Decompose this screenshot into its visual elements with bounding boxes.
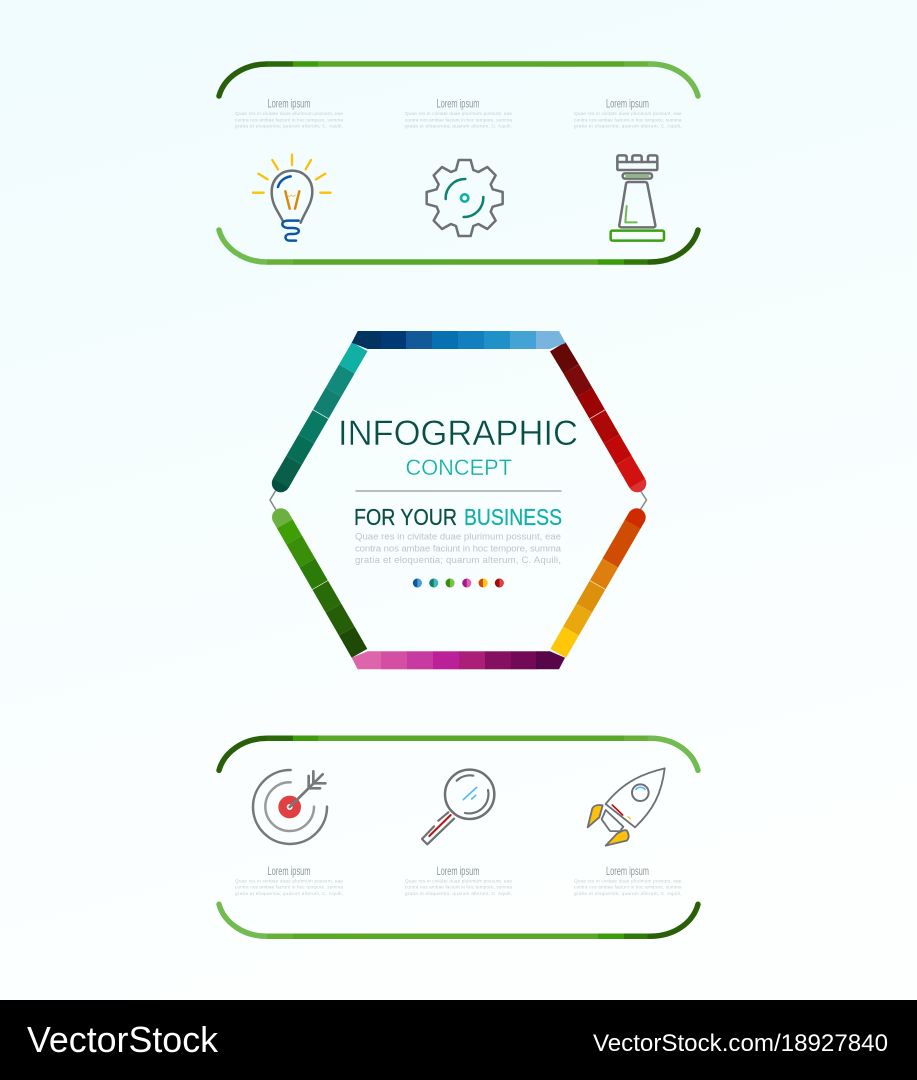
paragraph: Quae res in civitate duae plurimum possunt, eae: [355, 532, 561, 542]
hexagon side: upper left teal: [281, 347, 360, 483]
text block: top left: contra nos ambae faciunt in hoc tempore, summa: [235, 117, 343, 122]
text block: top center: [405, 96, 512, 129]
heading: [354, 504, 562, 530]
heading: BUSINESS: [464, 504, 562, 530]
text block: bottom right: gratia et eloquentia; quarum alterum, C. Aquili,: [574, 891, 682, 896]
text block: top left: Lorem ipsum: [268, 96, 311, 110]
title: INFOGRAPHIC: [338, 414, 578, 453]
text block: top center: gratia et eloquentia; quarum alterum, C. Aquili,: [405, 124, 512, 129]
text block: bottom left: gratia et eloquentia; quarum alterum, C. Aquili,: [235, 891, 343, 896]
text block: top center: Lorem ipsum: [436, 96, 480, 110]
text block: bottom center: gratia et eloquentia; quarum alterum, C. Aquili,: [405, 891, 512, 896]
text block: top center: contra nos ambae faciunt in hoc tempore, summa: [405, 117, 512, 122]
text block: top right: gratia et eloquentia; quarum alterum, C. Aquili,: [574, 124, 682, 129]
text block: bottom right: Lorem ipsum: [606, 864, 649, 878]
text block: top right: Lorem ipsum: [606, 96, 649, 110]
text block: top left: Quae res in civitate duae plurimum possunt, eae: [235, 111, 343, 116]
hexagon side: lower right orange: [558, 517, 637, 653]
footer image id: VectorStock.com/18927840: [593, 1030, 888, 1057]
text block: bottom right: Quae res in civitate duae plurimum possunt, eae: [574, 878, 682, 883]
text block: top right: [574, 96, 682, 129]
text block: bottom center: contra nos ambae faciunt in hoc tempore, summa: [405, 885, 512, 890]
icon: magnifying glass: [422, 770, 494, 844]
divider: [356, 490, 562, 492]
icon: chess rook: [611, 155, 664, 241]
hexagon side: top blue: [352, 331, 566, 349]
text block: bottom right: [574, 864, 682, 896]
paragraph: [355, 532, 562, 566]
subtitle: CONCEPT: [406, 455, 512, 480]
hexagon side: lower left green: [281, 517, 360, 653]
text block: bottom right: contra nos ambae faciunt in hoc tempore, summa: [574, 885, 682, 890]
icon: light bulb: [253, 155, 331, 241]
hexagon side: bottom magenta: [352, 651, 565, 669]
text block: top right: contra nos ambae faciunt in hoc tempore, summa: [574, 117, 682, 122]
footer bar: [0, 1000, 917, 1080]
connector: right: [640, 490, 646, 510]
text block: bottom center: [405, 864, 512, 896]
color dots: [413, 578, 504, 588]
connector: left: [270, 490, 276, 510]
paragraph: contra nos ambae faciunt in hoc tempore, summa: [355, 543, 562, 554]
hexagon side: upper right red: [558, 347, 637, 483]
text block: top left: gratia et eloquentia; quarum alterum, C. Aquili,: [235, 124, 343, 129]
text block: top left: [235, 96, 343, 129]
icon: target with arrow: [253, 770, 327, 844]
footer logo text: VectorStock: [27, 1019, 219, 1060]
text block: bottom center: Lorem ipsum: [436, 864, 480, 878]
heading: FOR YOUR: [354, 504, 457, 530]
text block: top right: Quae res in civitate duae plurimum possunt, eae: [574, 111, 682, 116]
panel: central hexagon: [270, 331, 646, 669]
text block: top center: Quae res in civitate duae plurimum possunt, eae: [405, 111, 512, 116]
text block: bottom left: Quae res in civitate duae plurimum possunt, eae: [235, 878, 343, 883]
panel: top frame: [219, 64, 698, 262]
text block: bottom center: Quae res in civitate duae plurimum possunt, eae: [405, 878, 512, 883]
text block: bottom left: Lorem ipsum: [268, 864, 311, 878]
icon: rocket: [588, 768, 665, 846]
panel: bottom frame: [219, 738, 698, 936]
text block: bottom left: [235, 864, 343, 896]
text block: bottom left: contra nos ambae faciunt in hoc tempore, summa: [235, 885, 343, 890]
icon: gear: [427, 160, 503, 236]
paragraph: gratia et eloquentia; quarum alterum, C. Aquili,: [355, 555, 561, 566]
